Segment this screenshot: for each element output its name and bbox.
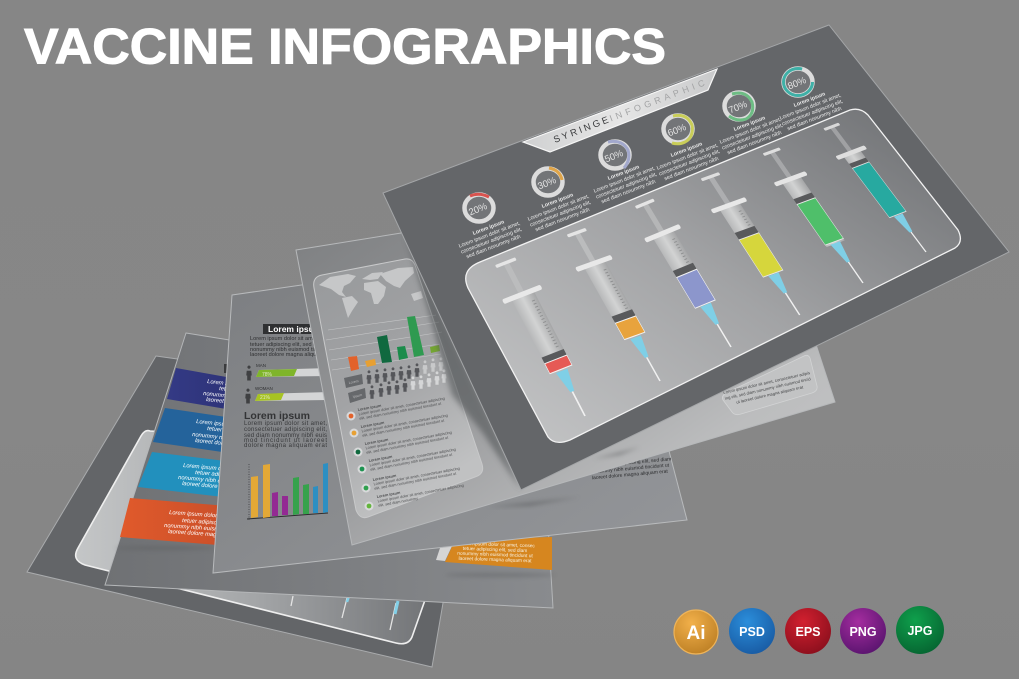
map page list: elit, sed diam nonummy (378, 497, 418, 508)
map bar chart (348, 316, 440, 371)
progress ring 80%: 80% (786, 75, 808, 92)
label 30%: sed diam nonummy nibh (535, 207, 591, 233)
band: blue (153, 408, 260, 456)
sheet 3 lower-right text: nonummy nibh euismod tincidunt ut (590, 463, 670, 475)
sheet 3 intro text: Lorem ipsum dolor sit amet, consec (250, 336, 338, 342)
pictogram row labels: Lorem (348, 379, 359, 385)
progress ring 70%: 70% (727, 99, 749, 116)
label 70%: Lorem ipsum (733, 115, 767, 133)
band text (164, 379, 279, 539)
map page list: elit, sed diam nonummy nibh euismod tincidunt ut (362, 419, 446, 438)
band text: Lorem ipsum dolor sit amet, (169, 510, 241, 521)
map page list: Lorem ipsum dolor sit amet, consectetuer adipiscing (377, 484, 464, 503)
sheet 3 lower-right text: consectetuer adipiscing elit, sed diam (588, 456, 672, 470)
map page list: Lorem ipsum (372, 474, 397, 482)
main sheet: syringe infographic (383, 25, 1009, 490)
sheet 3 lower-right text (588, 456, 672, 481)
map page list: Lorem ipsum (364, 438, 389, 446)
label 30% (527, 192, 592, 233)
band text: tetuer adipiscing elit, (182, 518, 235, 528)
amber band text: nonummy nibh euismod tincidunt ut (457, 551, 534, 559)
label 80% (779, 91, 844, 132)
band: navy (167, 368, 260, 413)
label 20% (458, 219, 523, 260)
woman progress row: 21% (260, 395, 271, 401)
band text: Lorem ipsum dolor sit amet, (183, 463, 255, 475)
label 70%: sed diam nonummy nibh (727, 130, 783, 156)
sheet 3 intro text: laoreet dolore magna aliquam (250, 352, 324, 358)
map page list: elit, sed diam nonummy nibh euismod tincidunt ut (359, 402, 443, 421)
label 20%: Lorem ipsum (472, 219, 506, 237)
main sheet shadow (405, 235, 521, 490)
band text: laoreet dolore magna (168, 529, 224, 539)
format badge: JPG (896, 606, 944, 654)
band text: tetuer adipiscing elit, (195, 470, 248, 481)
progress ring 50% (600, 141, 630, 168)
label 50%: consectetuer adipiscing elit, (595, 172, 658, 201)
pictogram row labels (344, 374, 366, 403)
label 20%: consectetuer adipiscing elit, (460, 227, 523, 256)
band text: laoreet dolore magna (182, 481, 238, 492)
progress ring 60% (664, 115, 692, 144)
label 30%: consectetuer adipiscing elit, (529, 200, 592, 229)
inner syringe panel (466, 109, 960, 442)
sheet 3 title pill: Lorem ipsum (268, 324, 322, 334)
pictogram people rows (367, 357, 446, 399)
sheet 3 intro text (250, 336, 338, 358)
sheet 3 paragraph (244, 421, 327, 449)
format badge: JPG: JPG (907, 624, 933, 638)
amber band text: Lorem ipsum dolor sit amet, consec (459, 541, 536, 549)
sheet 3: bar chart page (213, 240, 687, 573)
label 60%: sed diam nonummy nibh (664, 156, 720, 182)
lower right callout panel: ing elit, sed diam nonummy nibh euismod tincid (724, 376, 812, 401)
shadow streaks on sheet 2 (115, 546, 555, 577)
map page list: Lorem ipsum dolor sit amet, consectetuer adipiscing (373, 467, 460, 486)
lower right callout panel (722, 355, 817, 415)
sheet 1 needles (291, 596, 398, 630)
map page list: Lorem ipsum (357, 404, 382, 412)
map page list: Lorem ipsum dolor sit amet, consectetuer adipiscing (358, 397, 445, 416)
band text: Lorem ipsum dolor sit amet, (207, 379, 279, 392)
format badge: PSD (729, 608, 775, 654)
woman progress row (245, 386, 330, 403)
map page list: Lorem ipsum dolor sit amet, consectetuer adipiscing (369, 448, 456, 467)
sheet 3 paragraph: Lorem ipsum dolor sit amet, (244, 421, 327, 427)
label 80%: Lorem ipsum (793, 91, 827, 109)
label 60% (656, 141, 721, 182)
map page list: Lorem ipsum (368, 455, 393, 463)
map page list: Lorem ipsum dolor sit amet, consectetuer adipiscing (365, 431, 452, 450)
progress ring 20%: 20% (467, 201, 489, 218)
format badge: Ai: Ai (686, 623, 706, 644)
amber band icon (436, 546, 452, 561)
progress ring 30% (534, 168, 562, 196)
banner: SYRINGE (552, 115, 610, 146)
banner: INFOGRAPHIC (608, 78, 706, 123)
label 60%: consectetuer adipiscing elit, (658, 149, 721, 178)
sheet 2 heading icon (224, 364, 230, 373)
progress ring 30%: 30% (536, 175, 558, 192)
label 50% (593, 164, 658, 205)
map page list: Lorem ipsum (360, 421, 385, 429)
format badge: PNG (840, 608, 886, 654)
syringe 70% green (755, 145, 879, 289)
label 50%: sed diam nonummy nibh (601, 179, 657, 205)
map page list: elit, sed diam nonummy nibh euismod tincidunt ut (366, 436, 450, 455)
man progress row: MAN (256, 363, 266, 368)
sheet 4: world map page (296, 175, 835, 545)
lower right callout panel: Lorem ipsum dolor sit amet, consectetuer adipis (723, 370, 811, 395)
syringe 50% purple (626, 195, 748, 354)
sheet 3 paragraph: mod tincidunt ut laoreet (244, 438, 327, 444)
band: cyan (138, 452, 250, 499)
sheet 3 lower-right text: laoreet dolore magna aliquam erat (592, 469, 669, 481)
syringe 60% yellow (692, 169, 817, 321)
progress ring 20% (464, 194, 494, 222)
syringe 20% red (486, 254, 604, 424)
band: red-orange (120, 498, 240, 546)
sheet 4 shadow streak (593, 447, 640, 459)
band text: nonummy nibh euismod (164, 523, 226, 533)
label 70%: consectetuer adipiscing elit, (721, 123, 784, 152)
man progress row (246, 363, 330, 380)
sheet 3 paragraph: dolore magna aliquam erat (244, 443, 327, 449)
format badge: PSD: PSD (739, 625, 765, 639)
sheet 3 heading: Lorem ipsum (244, 410, 310, 422)
format badge: EPS: EPS (795, 625, 821, 639)
band text: nonummy nibh euismod (203, 391, 265, 404)
format badge: Ai (674, 610, 718, 654)
band text: nonummy nibh euismod (178, 475, 240, 486)
label 80%: Lorem ipsum dolor sit amet, (779, 93, 842, 122)
band text: laoreet dolore magna (206, 397, 262, 409)
label 30%: Lorem ipsum dolor sit amet, (527, 194, 590, 223)
map page list: Lorem ipsum dolor sit amet, consectetuer adipiscing (361, 414, 448, 433)
band text: laoreet dolore magna (195, 438, 251, 450)
map page list: Lorem ipsum (376, 491, 401, 499)
label 70% (719, 115, 784, 156)
label 50%: Lorem ipsum dolor sit amet, (593, 166, 656, 195)
banner (523, 69, 717, 152)
sheet 3 intro text: nonummy nibh euismod tincidunt (250, 347, 332, 353)
amber band text: laoreet dolore magna aliquam erat (458, 556, 532, 564)
amber band text: tetuer adipiscing elit, sed diam (463, 546, 527, 554)
progress ring 70% (724, 92, 754, 120)
band text: nonummy nibh euismod (192, 432, 254, 445)
map page list: elit, sed diam nonummy nibh euismod tincidunt ut (370, 453, 454, 472)
label 80%: sed diam nonummy nibh (787, 106, 843, 132)
band text: tetuer adipiscing elit, (207, 426, 260, 438)
label 60%: Lorem ipsum dolor sit amet, (656, 143, 719, 172)
label 20%: sed diam nonummy nibh (466, 234, 522, 260)
sheet 4 inner panel (314, 259, 483, 518)
title: VACCINE INFOGRAPHICS (24, 18, 666, 74)
band: amber (445, 537, 552, 570)
sheet 3 bar chart (247, 463, 328, 520)
band text: tetuer adipiscing elit, (219, 386, 272, 398)
sheet 1 inner panel (76, 431, 440, 644)
man progress row: 78% (262, 372, 273, 378)
woman progress row: WOMAN (255, 386, 273, 391)
sheet 3 shadow streak (487, 497, 580, 507)
progress ring 50%: 50% (603, 148, 625, 165)
world map (319, 267, 423, 318)
label 20%: Lorem ipsum dolor sit amet, (458, 221, 521, 250)
pictogram row labels: Ipsum (352, 393, 363, 399)
sheet 1: back syringe page (27, 356, 470, 667)
syringe 30% orange (558, 225, 678, 387)
syringe 80% teal (816, 120, 940, 258)
label 30%: Lorem ipsum (541, 192, 575, 210)
band text: Lorem ipsum dolor sit amet, (196, 419, 268, 432)
progress ring 80% (784, 68, 812, 96)
label 50%: Lorem ipsum (607, 164, 641, 182)
sheet 2: coloured bands page (105, 333, 555, 608)
format badge: PNG: PNG (849, 625, 877, 639)
progress ring 60%: 60% (666, 122, 688, 139)
format badge: EPS (785, 608, 831, 654)
sheet 3 intro text: tetuer adipiscing elit, sed diam (250, 342, 326, 348)
sheet 3 paragraph: consectetuer adipiscing elit, (244, 427, 327, 433)
label 60%: Lorem ipsum (670, 141, 704, 159)
map page list: elit, sed diam nonummy nibh euismod tincidunt ut (374, 472, 458, 491)
chart grid (326, 315, 442, 370)
map page list (346, 392, 465, 510)
label 70%: Lorem ipsum dolor sit amet, (719, 117, 782, 146)
lower right callout panel: ut laoreet dolore magna aliquam erat (736, 384, 804, 405)
amber band text (457, 541, 536, 564)
sheet 3 paragraph: sed diam nonummy nibh euis (244, 433, 327, 439)
label 80%: consectetuer adipiscing elit, (781, 99, 844, 128)
